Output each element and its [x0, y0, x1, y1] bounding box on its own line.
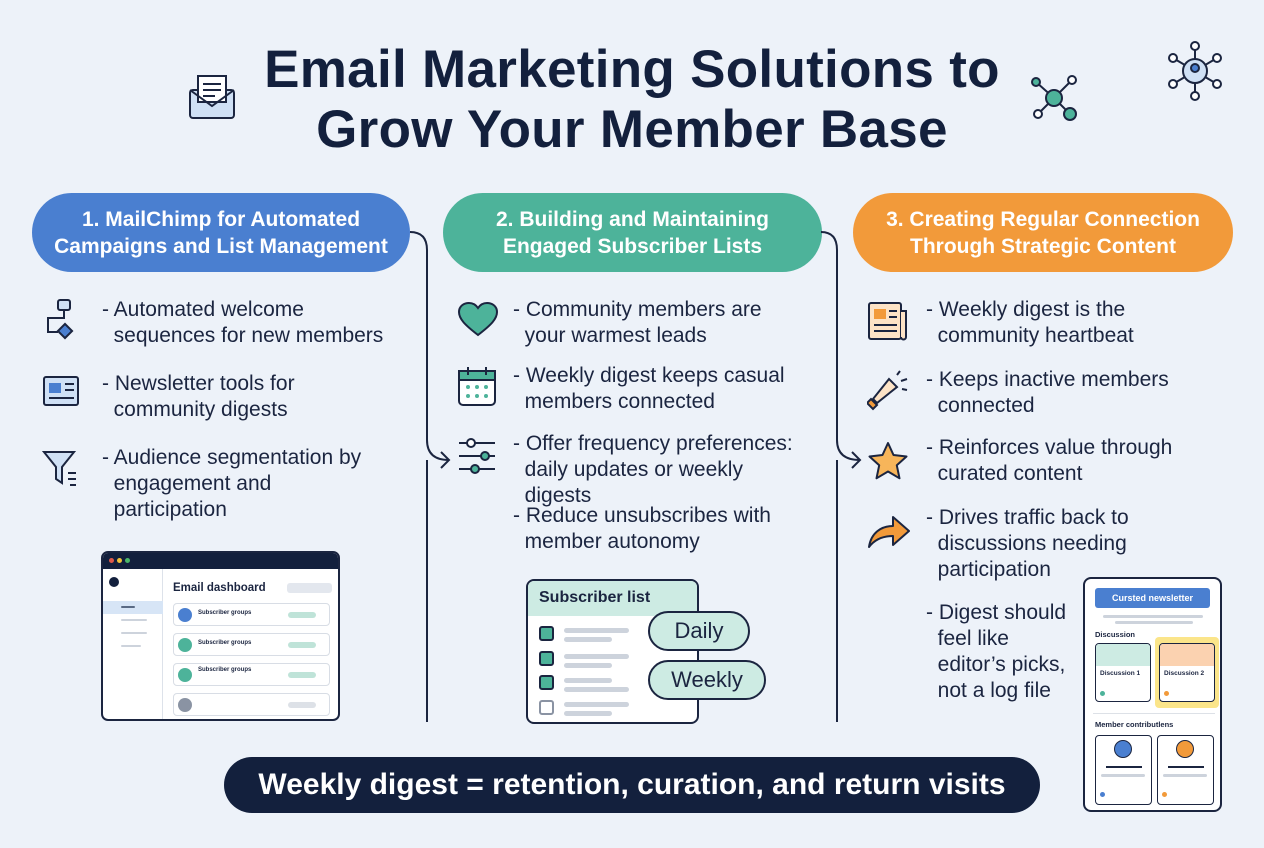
icon: envelope [189, 75, 235, 119]
panel: column 3 items: - Reinforces value through [926, 436, 1172, 459]
chart: subscriber list mockup: Subscriber list [539, 589, 650, 606]
title: Email Marketing Solutions to [264, 40, 1000, 99]
chart: curated newsletter mockup: Member contributlens [1095, 720, 1173, 729]
panel: column 3 items: - Digest should [926, 601, 1066, 624]
chart: email dashboard mockup: Subscriber groups [198, 610, 251, 616]
chart: curated newsletter mockup: Discussion 1 [1100, 670, 1140, 677]
panel: column 2 header [443, 193, 822, 272]
callout: bottom banner: Weekly digest = retention, curation, and return visits [258, 768, 1006, 801]
icon: star [868, 442, 908, 480]
panel: column 3 items: curated content [938, 462, 1082, 485]
panel: column 3 items: editor’s picks, [938, 653, 1065, 676]
panel: column 3 header: Through Strategic Content [910, 234, 1176, 258]
label: Weekly: Weekly [671, 667, 743, 692]
panel: column 2 items: - Offer frequency preferences: [513, 432, 793, 455]
panel: column 3 items: - Drives traffic back to [926, 506, 1129, 529]
panel: column 1 header: 1. MailChimp for Automated [82, 208, 360, 230]
panel: column 1 header: Campaigns and List Management [54, 234, 388, 258]
label: Daily [648, 611, 750, 651]
panel: column 1 items: engagement and [114, 472, 271, 495]
panel: column 1 header [32, 193, 410, 272]
panel: column 2 header: Engaged Subscriber Lists [503, 234, 762, 258]
icon: megaphone [867, 370, 908, 410]
icon: newspaper [868, 302, 907, 340]
title: Grow Your Member Base [316, 100, 948, 159]
chart: email dashboard mockup: Subscriber groups [198, 640, 251, 646]
panel: column 2 items: daily updates or weekly [525, 458, 743, 481]
arrow: connector 1 [410, 231, 450, 722]
chart: curated newsletter mockup: Cursted newsletter [1112, 593, 1193, 603]
panel: column 2 items: member autonomy [525, 530, 700, 553]
panel: column 1 items: - Audience segmentation by [102, 446, 361, 469]
icon: network small [1031, 75, 1077, 121]
panel: column 3 items: - Keeps inactive members [926, 368, 1169, 391]
panel: column 3 items: - Weekly digest is the [926, 298, 1125, 321]
panel: column 1 items: sequences for new members [114, 324, 383, 347]
panel: column 3 items [867, 298, 1172, 702]
panel: column 2 items: members connected [525, 390, 715, 413]
chart: curated newsletter mockup: Discussion [1095, 630, 1135, 639]
icon: share arrow [868, 516, 910, 548]
label: Daily: Daily [675, 618, 723, 643]
callout: bottom banner [224, 757, 1040, 813]
panel: column 3 header: 3. Creating Regular Connection [886, 208, 1200, 230]
arrow: connector 2 [821, 231, 862, 722]
panel: column 1 items: community digests [114, 398, 288, 421]
panel: column 3 items: community heartbeat [938, 324, 1134, 347]
chart: email dashboard mockup: Subscriber groups [198, 667, 251, 673]
panel: column 2 items [458, 298, 793, 553]
panel: column 3 items: participation [938, 558, 1051, 581]
panel: column 3 items: feel like [938, 627, 1009, 650]
icon: workflow [47, 299, 74, 340]
panel: column 3 items: connected [938, 394, 1035, 417]
panel: column 1 items: - Newsletter tools for [102, 372, 295, 395]
icon: sliders [459, 438, 495, 474]
panel: column 3 header [853, 193, 1233, 272]
icon: calendar [458, 367, 496, 406]
panel: column 2 items: - Community members are [513, 298, 762, 321]
label: Weekly [648, 660, 766, 700]
chart: email dashboard mockup: Email dashboard [173, 582, 266, 594]
panel: column 2 items: your warmest leads [525, 324, 707, 347]
chart: email dashboard mockup [101, 551, 340, 721]
panel: column 2 items: - Weekly digest keeps casual [513, 364, 785, 387]
panel: column 1 items: - Automated welcome [102, 298, 304, 321]
chart: curated newsletter mockup: Discussion 2 [1164, 670, 1204, 677]
icon: newsletter [43, 376, 79, 406]
chart: subscriber list mockup [526, 579, 766, 724]
panel: column 3 items: discussions needing [938, 532, 1127, 555]
title [264, 40, 1000, 159]
icon: heart [458, 302, 498, 336]
chart: curated newsletter mockup [1083, 577, 1222, 812]
panel: column 1 items [42, 298, 383, 521]
icon: network member [1168, 41, 1222, 101]
panel: column 2 items: digests [525, 484, 591, 507]
panel: column 3 items: not a log file [938, 679, 1051, 702]
panel: column 2 header: 2. Building and Maintaining [496, 208, 769, 230]
icon: funnel [42, 451, 76, 486]
panel: column 2 items: - Reduce unsubscribes with [513, 504, 771, 527]
panel: column 1 items: participation [114, 498, 227, 521]
